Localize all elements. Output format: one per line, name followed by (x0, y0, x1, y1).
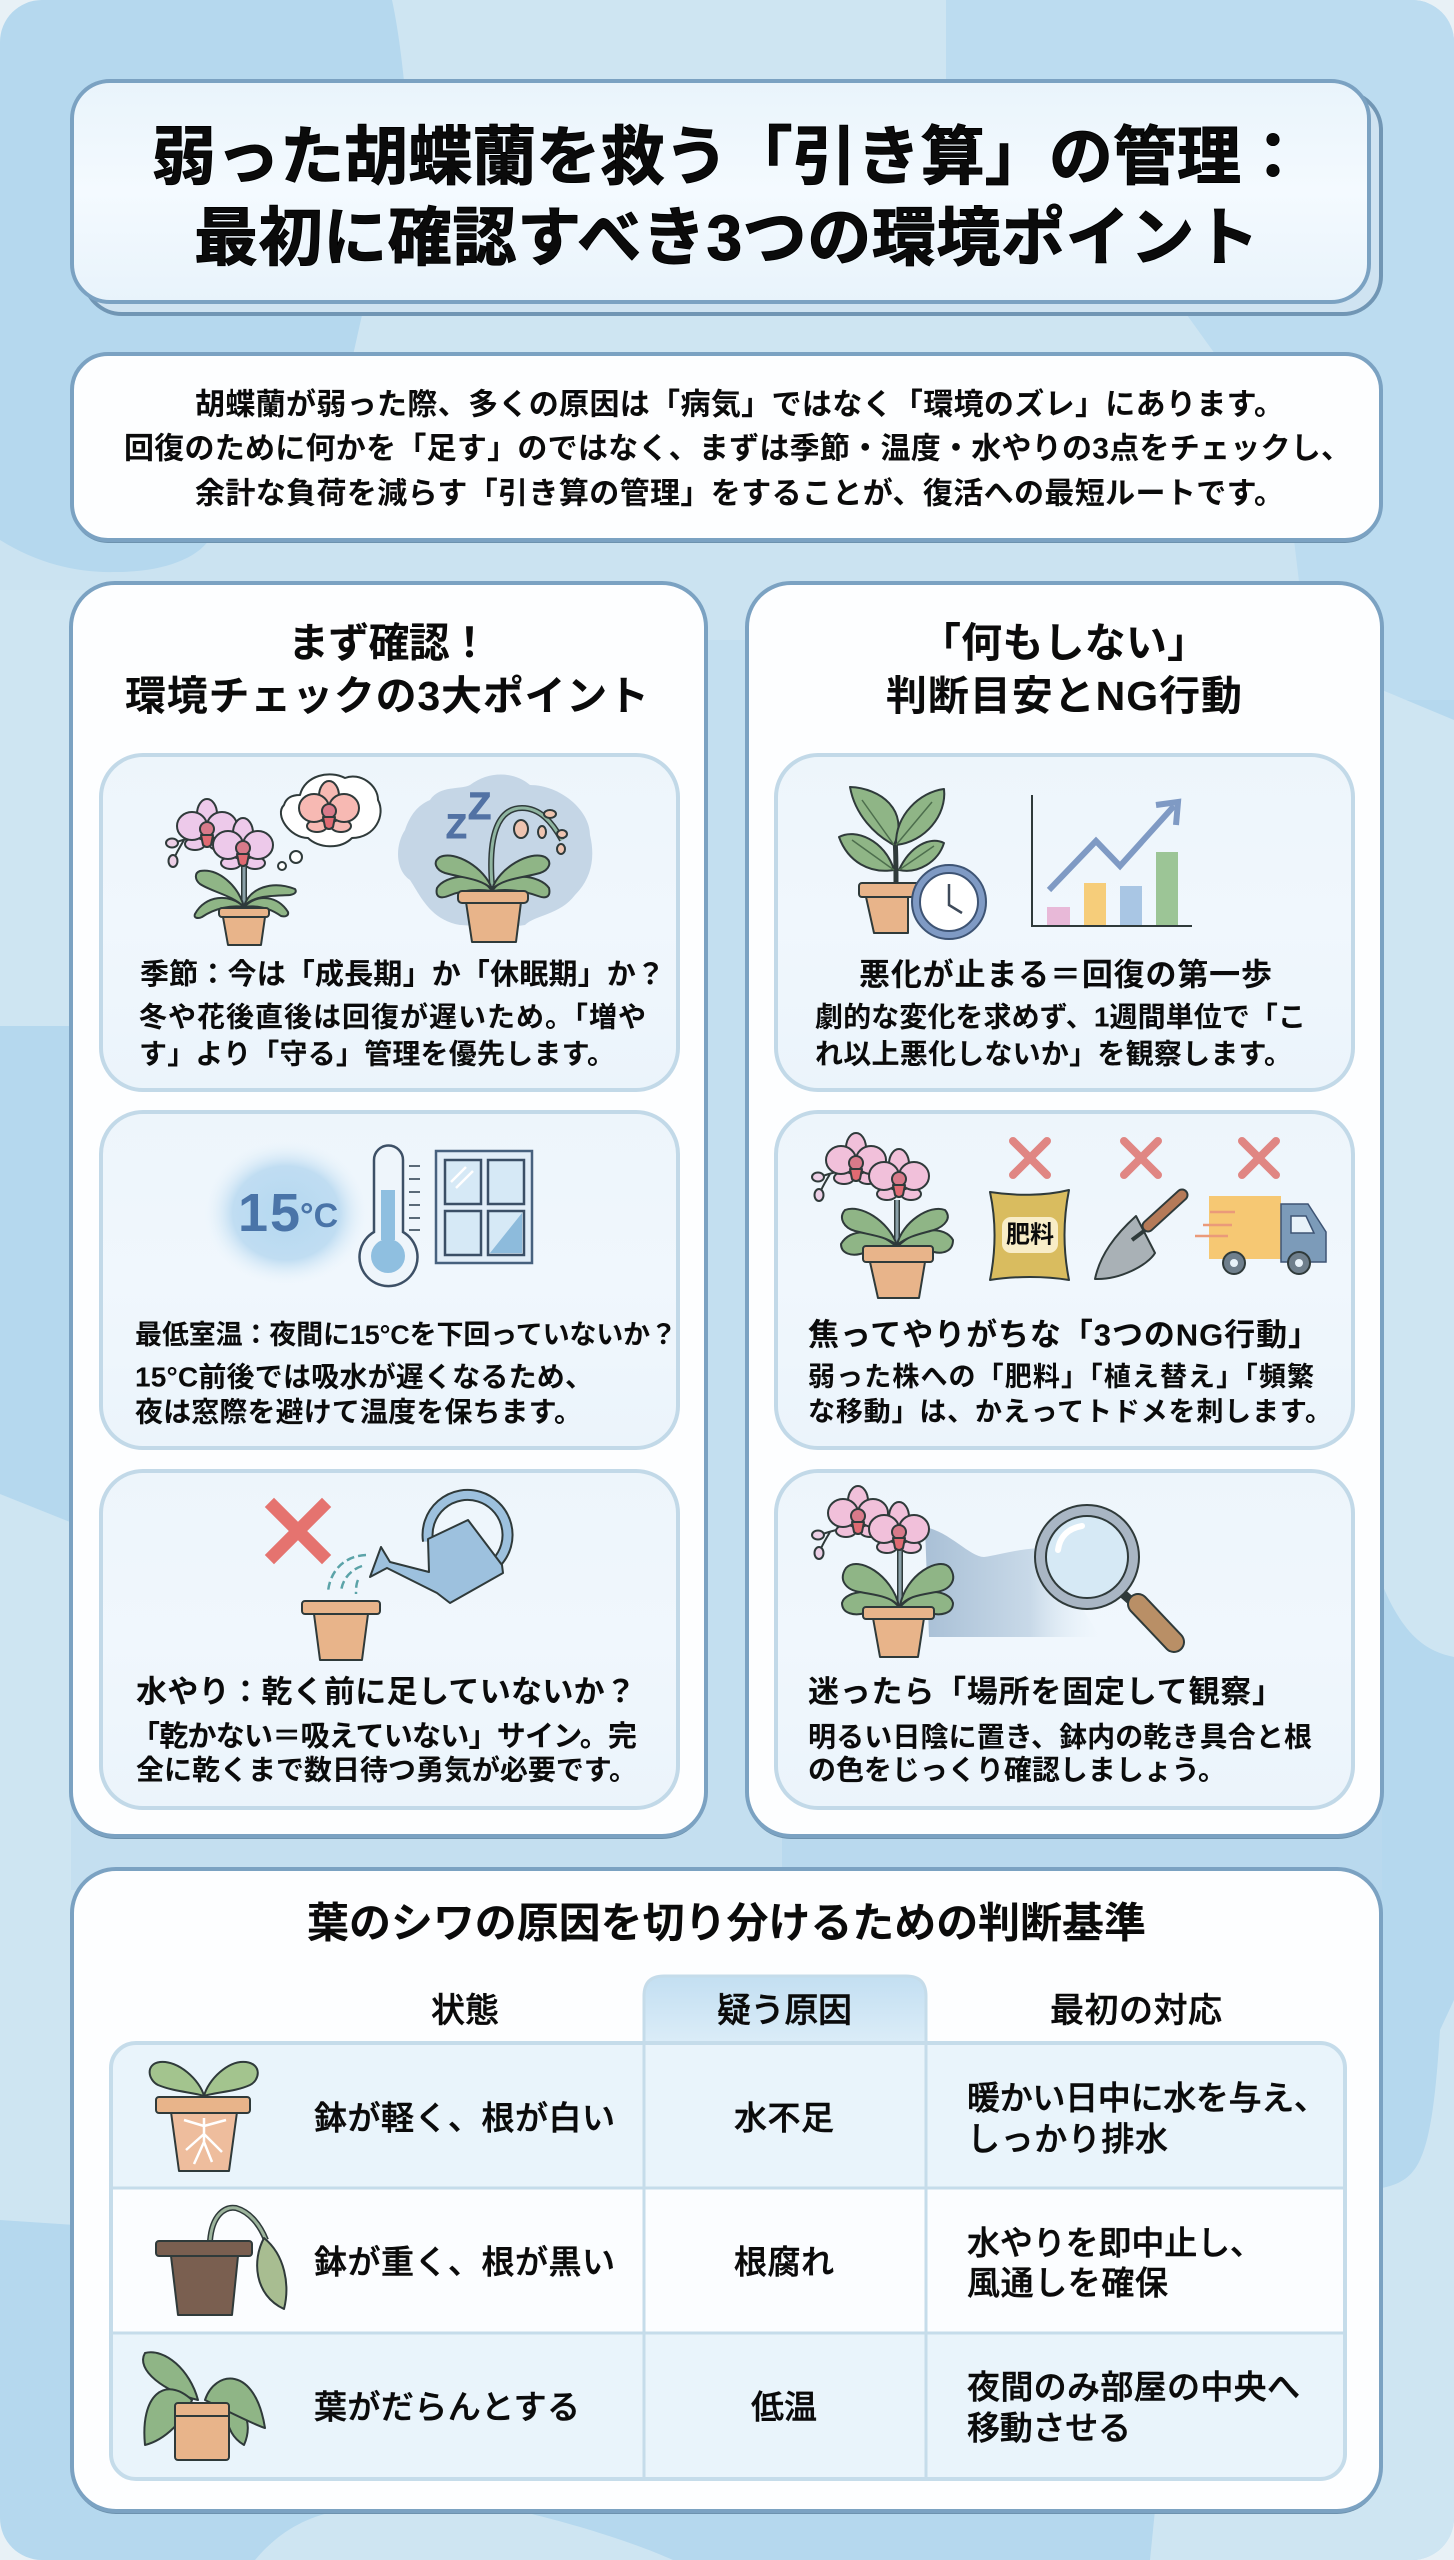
intro text: 回復のために何かを「足す」のではなく、まずは季節・温度・水やりの3点をチェックし、 (124, 432, 1351, 466)
panel: environment check (71, 583, 706, 1839)
title banner (72, 81, 1381, 314)
icon: orchid (812, 1133, 953, 1298)
card text (131, 1674, 637, 1786)
icon: red cross (274, 1507, 322, 1555)
icon: NG crosses (1013, 1141, 1276, 1175)
card text: 全に乾くまで数日待つ勇気が必要です。 (136, 1754, 637, 1786)
panel heading (125, 620, 649, 719)
row: root rot: 根腐れ (734, 2244, 834, 2280)
panel heading (886, 620, 1242, 719)
row: water shortage: 水不足 (734, 2100, 834, 2136)
title text (152, 121, 1305, 274)
column headers: 状態 (431, 1992, 499, 2030)
icon: 15 degrees glow (204, 1141, 368, 1285)
icon: window (436, 1151, 532, 1263)
intro text: 胡蝶蘭が弱った際、多くの原因は「病気」ではなく「環境のズレ」にあります。 (195, 388, 1284, 422)
icon: 15 degrees glow: 15 (238, 1183, 300, 1243)
card text: す」より「守る」管理を優先します。 (139, 1038, 615, 1070)
card text: 劇的な変化を求めず、1週間単位で「こ (815, 1002, 1306, 1032)
column headers: 最初の対応 (1050, 1992, 1222, 2030)
icon: drooping leaves (143, 2352, 265, 2460)
icon: pot with white roots (150, 2062, 258, 2171)
card text: 最低室温：夜間に15°Cを下回っていないか？ (135, 1320, 677, 1350)
highlighted header tab (644, 1976, 926, 2046)
card text: な移動」は、かえってトドメを刺します。 (808, 1397, 1332, 1427)
icon: magnifying glass (1035, 1505, 1174, 1642)
panel heading: 判断目安とNG行動 (886, 673, 1242, 719)
icon: dormant orchid: Z (446, 808, 467, 846)
column headers (431, 1992, 1222, 2030)
icon: 15 degrees glow: °C (300, 1197, 338, 1235)
row: low temperature: 夜間のみ部屋の中央へ (967, 2368, 1300, 2406)
row: low temperature: 葉がだらんとする (314, 2388, 580, 2426)
row: root rot: 鉢が重く、根が黒い (314, 2244, 615, 2280)
table rows (111, 2043, 1345, 2479)
card text: 「乾かない＝吸えていない」サイン。完 (131, 1720, 637, 1753)
card text (808, 1318, 1332, 1427)
row: water shortage: 鉢が軽く、根が白い (314, 2100, 615, 2136)
card text: れ以上悪化しないか」を観察します。 (815, 1038, 1292, 1070)
intro text: 余計な負荷を減らす「引き算の管理」をすることが、復活への最短ルートです。 (195, 476, 1284, 510)
card text: 弱った株への「肥料」「植え替え」「頻繁 (808, 1362, 1314, 1392)
icon: moving truck (1195, 1196, 1326, 1274)
icon: thermometer (360, 1146, 420, 1286)
icon: shade behind orchid (925, 1527, 1100, 1637)
card text: 迷ったら「場所を固定して観察」 (808, 1674, 1283, 1710)
card text: 明るい日陰に置き、鉢内の乾き具合と根 (808, 1722, 1312, 1752)
card: recovery first step (776, 755, 1353, 1090)
card text (815, 958, 1306, 1070)
bar chart (1032, 795, 1192, 926)
panel heading: まず確認！ (288, 620, 490, 666)
card text (135, 1320, 677, 1428)
card text: 15°C前後では吸水が遅くなるため、 (135, 1360, 593, 1392)
icon: plant with clock (839, 787, 986, 939)
row: root rot: 風通しを確保 (967, 2264, 1168, 2302)
card: watering (101, 1471, 678, 1808)
icon: blooming orchid with thought bubble (166, 774, 381, 945)
row: low temperature (143, 2352, 1300, 2460)
panel heading: 環境チェックの3大ポイント (125, 673, 649, 719)
icon: trowel (1095, 1195, 1182, 1279)
card text: の色をじっくり確認しましょう。 (808, 1754, 1226, 1786)
card text: 冬や花後直後は回復が遅いため。「増や (139, 1000, 646, 1032)
row: low temperature: 低温 (751, 2388, 817, 2426)
card text: 季節：今は「成長期」か「休眠期」か？ (140, 958, 665, 991)
column headers: 疑う原因 (717, 1992, 852, 2030)
card text: 夜は窓際を避けて温度を保ちます。 (135, 1396, 582, 1428)
panel: leaf wrinkle criteria (72, 1869, 1381, 2514)
title text: 弱った胡蝶蘭を救う「引き算」の管理： (152, 121, 1305, 193)
panel heading: 葉のシワの原因を切り分けるための判断基準 (307, 1900, 1146, 1946)
card text: 水やり：乾く前に足していないか？ (136, 1674, 636, 1710)
row: water shortage: しっかり排水 (967, 2120, 1168, 2158)
icon: orchid (812, 1486, 953, 1657)
card text: 悪化が止まる＝回復の第一歩 (859, 958, 1272, 992)
icon: watering can (370, 1495, 508, 1603)
icon: empty pot (302, 1601, 380, 1660)
card: season (101, 755, 678, 1090)
icon: water drops (328, 1555, 366, 1594)
panel: do nothing judgement (747, 583, 1382, 1839)
row: water shortage: 暖かい日中に水を与え、 (967, 2080, 1327, 2116)
card: minimum room temperature (101, 1112, 678, 1448)
card: NG actions (776, 1112, 1353, 1448)
card text (139, 958, 665, 1070)
card text: 焦ってやりがちな「3つのNG行動」 (808, 1318, 1319, 1352)
icon: fertilizer bag (990, 1190, 1069, 1280)
row: low temperature: 移動させる (967, 2410, 1131, 2446)
row: water shortage (150, 2062, 1327, 2171)
row: root rot: 水やりを即中止し、 (967, 2224, 1263, 2262)
icon: fertilizer bag: 肥料 (1006, 1222, 1054, 1248)
title text: 最初に確認すべき3つの環境ポイント (194, 202, 1259, 274)
row: root rot (156, 2208, 1263, 2315)
intro panel (72, 354, 1381, 543)
icon: dormant orchid: Z (468, 786, 491, 828)
card: observe in a fixed place (776, 1471, 1353, 1808)
table (111, 1976, 1345, 2479)
icon: dormant orchid (398, 774, 592, 942)
icon: wilted dark pot (156, 2208, 286, 2315)
intro text (124, 388, 1351, 510)
panel heading: 「何もしない」 (920, 620, 1208, 666)
card text (808, 1674, 1312, 1786)
